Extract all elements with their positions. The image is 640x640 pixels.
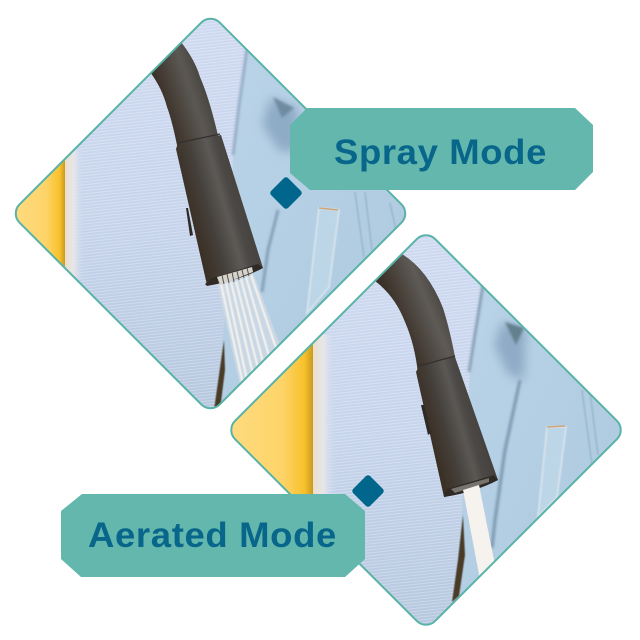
spray water — [217, 272, 280, 385]
diamond outline — [226, 230, 626, 630]
label: spray mode — [290, 108, 593, 190]
photo: shirt and denim background — [225, 225, 630, 635]
label: aerated mode: Aerated Mode — [88, 516, 337, 555]
label: aerated mode — [61, 494, 365, 577]
faucet neck — [150, 42, 219, 150]
faucet neck — [375, 254, 456, 374]
label: spray mode: Spray Mode — [334, 133, 547, 172]
faucet body — [176, 135, 263, 285]
panel: spray mode photo — [10, 10, 420, 415]
icon: faucet with aerated stream — [375, 254, 498, 585]
photo: shirt and denim background — [10, 10, 420, 415]
panel: aerated mode photo — [225, 225, 630, 635]
diamond outline — [10, 13, 411, 414]
icon: spray mode diamond marker — [269, 176, 303, 210]
aerated water — [464, 489, 494, 576]
icon: faucet with spray — [150, 42, 280, 385]
faucet body — [416, 357, 498, 497]
icon: aerated mode diamond marker — [351, 474, 385, 508]
